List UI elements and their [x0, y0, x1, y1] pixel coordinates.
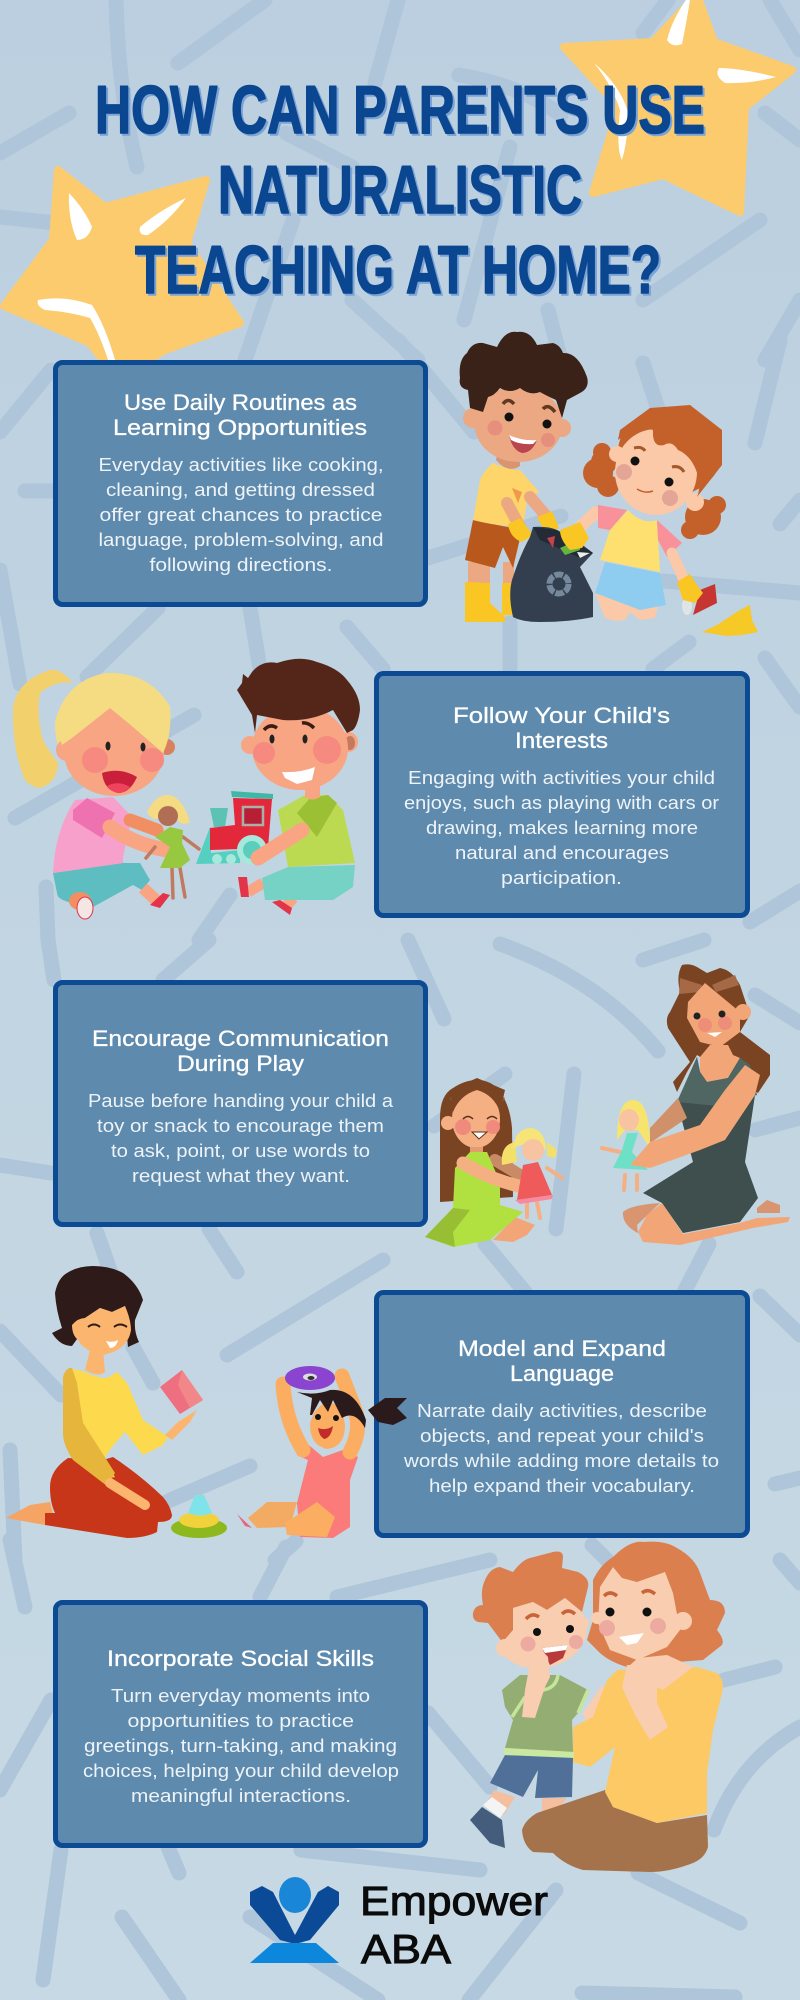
text: child interests: [404, 767, 719, 888]
text: social skills: opportunities to practice: [128, 1710, 354, 1731]
text: child interests: drawing, makes learning more: [426, 817, 698, 838]
illustration: mother and son whispering: [470, 1542, 725, 1872]
text: child interests: enjoys, such as playing with cars or: [404, 792, 719, 813]
text: social skills: choices, helping your child develop: [83, 1760, 399, 1781]
illustration: girl and mother with dolls: [425, 964, 790, 1247]
heading: model language: [458, 1336, 666, 1386]
logo wordmark: Empower: [360, 1878, 548, 1924]
text: model language: objects, and repeat your child's: [420, 1425, 704, 1446]
text: social skills: Turn everyday moments into: [111, 1685, 370, 1706]
text: communication during play: [88, 1090, 394, 1186]
heading: communication during play: [92, 1026, 389, 1076]
panel: child interests: [376, 674, 748, 916]
panel: daily routines: [56, 362, 426, 604]
heading: communication during play: Encourage Communication: [92, 1026, 389, 1051]
text: model language: help expand their vocabulary.: [429, 1475, 695, 1496]
heading: child interests: Interests: [515, 728, 608, 753]
logo icon: [250, 1877, 339, 1963]
text: social skills: meaningful interactions.: [131, 1785, 351, 1806]
heading: model language: Model and Expand: [458, 1336, 666, 1361]
star: top right: [564, 0, 792, 212]
text: social skills: [83, 1685, 399, 1806]
text: daily routines: offer great chances to practice: [100, 504, 382, 525]
text: daily routines: Everyday activities like cooking,: [98, 454, 384, 475]
heading: child interests: [453, 703, 670, 753]
heading: daily routines: Learning Opportunities: [113, 415, 367, 440]
panel: communication during play: [56, 982, 426, 1224]
text: daily routines: cleaning, and getting dressed: [106, 479, 375, 500]
text: communication during play: toy or snack to encourage them: [97, 1115, 384, 1136]
text: model language: Narrate daily activities, describe: [417, 1400, 707, 1421]
heading: communication during play: During Play: [177, 1051, 304, 1076]
panel: social skills: [56, 1602, 426, 1846]
text: model language: [403, 1400, 719, 1496]
text: daily routines: language, problem-solving, and: [98, 529, 384, 550]
heading: daily routines: [113, 390, 367, 440]
logo wordmark: [360, 1878, 548, 1972]
text: child interests: Engaging with activities your child: [408, 767, 715, 788]
text: communication during play: request what they want.: [132, 1165, 350, 1186]
text: child interests: natural and encourages: [455, 842, 669, 863]
title: [95, 72, 705, 308]
heading: social skills: Incorporate Social Skills: [107, 1646, 374, 1671]
text: daily routines: [98, 454, 384, 575]
logo wordmark: ABA: [361, 1926, 452, 1972]
illustration: mother and toddler with toys: [6, 1266, 407, 1538]
heading: model language: Language: [510, 1361, 614, 1386]
star: left: [4, 170, 240, 378]
text: social skills: greetings, turn-taking, and making: [84, 1735, 397, 1756]
heading: daily routines: Use Daily Routines as: [124, 390, 357, 415]
panel: model language: [376, 1292, 748, 1536]
text: communication during play: to ask, point, or use words to: [111, 1140, 370, 1161]
heading: child interests: Follow Your Child's: [453, 703, 670, 728]
text: model language: words while adding more details to: [403, 1450, 719, 1471]
text: child interests: participation.: [501, 867, 622, 888]
logo: Empower ABA: [250, 1877, 548, 1972]
text: daily routines: following directions.: [150, 554, 332, 575]
text: communication during play: Pause before handing your child a: [88, 1090, 394, 1111]
illustration: children cleaning up: [460, 332, 758, 636]
title: NATURALISTIC: [218, 152, 582, 228]
illustration: children playing with doll and train: [13, 659, 360, 919]
icon: recycling symbol: [550, 574, 568, 594]
